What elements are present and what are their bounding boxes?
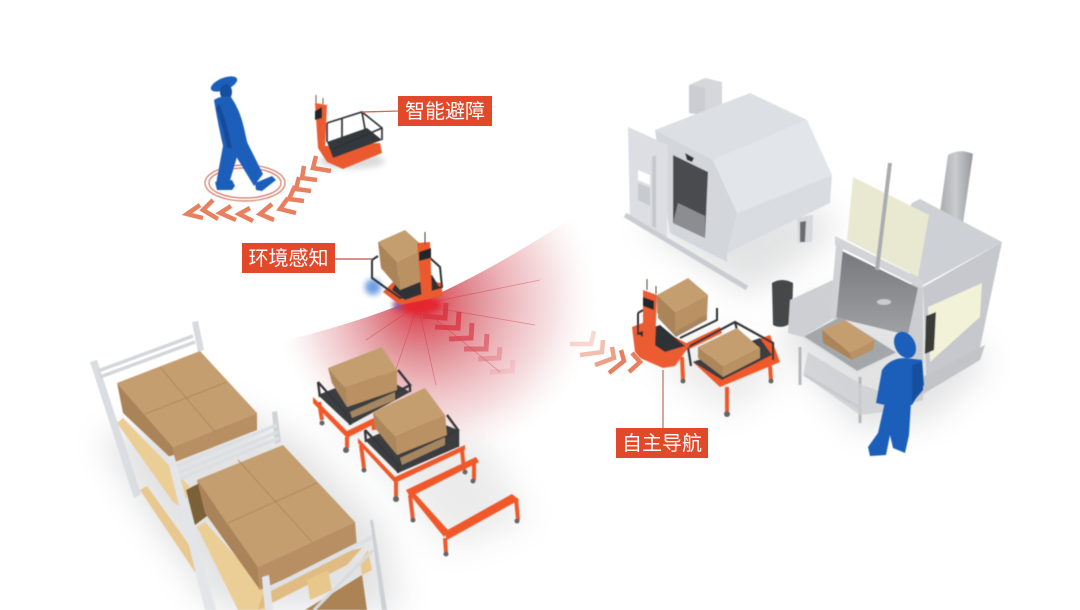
connector lines (333, 111, 663, 428)
label: intelligent obstacle avoidance (398, 96, 492, 126)
label: autonomous navigation: 自主导航 (622, 432, 702, 455)
orange carts (313, 347, 520, 556)
machine 1: booth (625, 78, 832, 288)
label: environment perception: 环境感知 (248, 247, 328, 270)
avoidance robot (315, 95, 385, 169)
label: environment perception (242, 243, 335, 273)
approach chevrons (570, 331, 640, 373)
dock robot and cart (632, 278, 780, 417)
machine 2: washing station (772, 151, 1002, 423)
rack 1 front rail (177, 411, 281, 479)
towed cart (672, 322, 780, 417)
label: autonomous navigation (616, 428, 708, 458)
cart 2 (358, 388, 468, 502)
standing worker (868, 328, 924, 456)
label: intelligent obstacle avoidance: 智能避障 (405, 100, 485, 123)
red sensing cone (260, 216, 640, 500)
rack 2 front frame (167, 455, 387, 610)
sensing robot (372, 230, 443, 305)
cone chevrons (423, 303, 513, 372)
robot body (632, 278, 717, 368)
rack 1 cartons (117, 351, 257, 462)
rack 2 cartons (197, 445, 357, 590)
cart 3 (406, 457, 520, 556)
floor shadows (100, 200, 990, 610)
rack, rear (90, 321, 387, 610)
walking worker (205, 73, 285, 201)
rack 1 frame and pallet (90, 321, 204, 572)
safety ring (205, 165, 285, 201)
cart 1 (313, 347, 410, 453)
barrel (772, 280, 793, 327)
rack 2 pallet and under-shelf (186, 470, 372, 610)
avoidance path chevrons (187, 156, 331, 221)
red glow under sensing robot (365, 279, 442, 313)
